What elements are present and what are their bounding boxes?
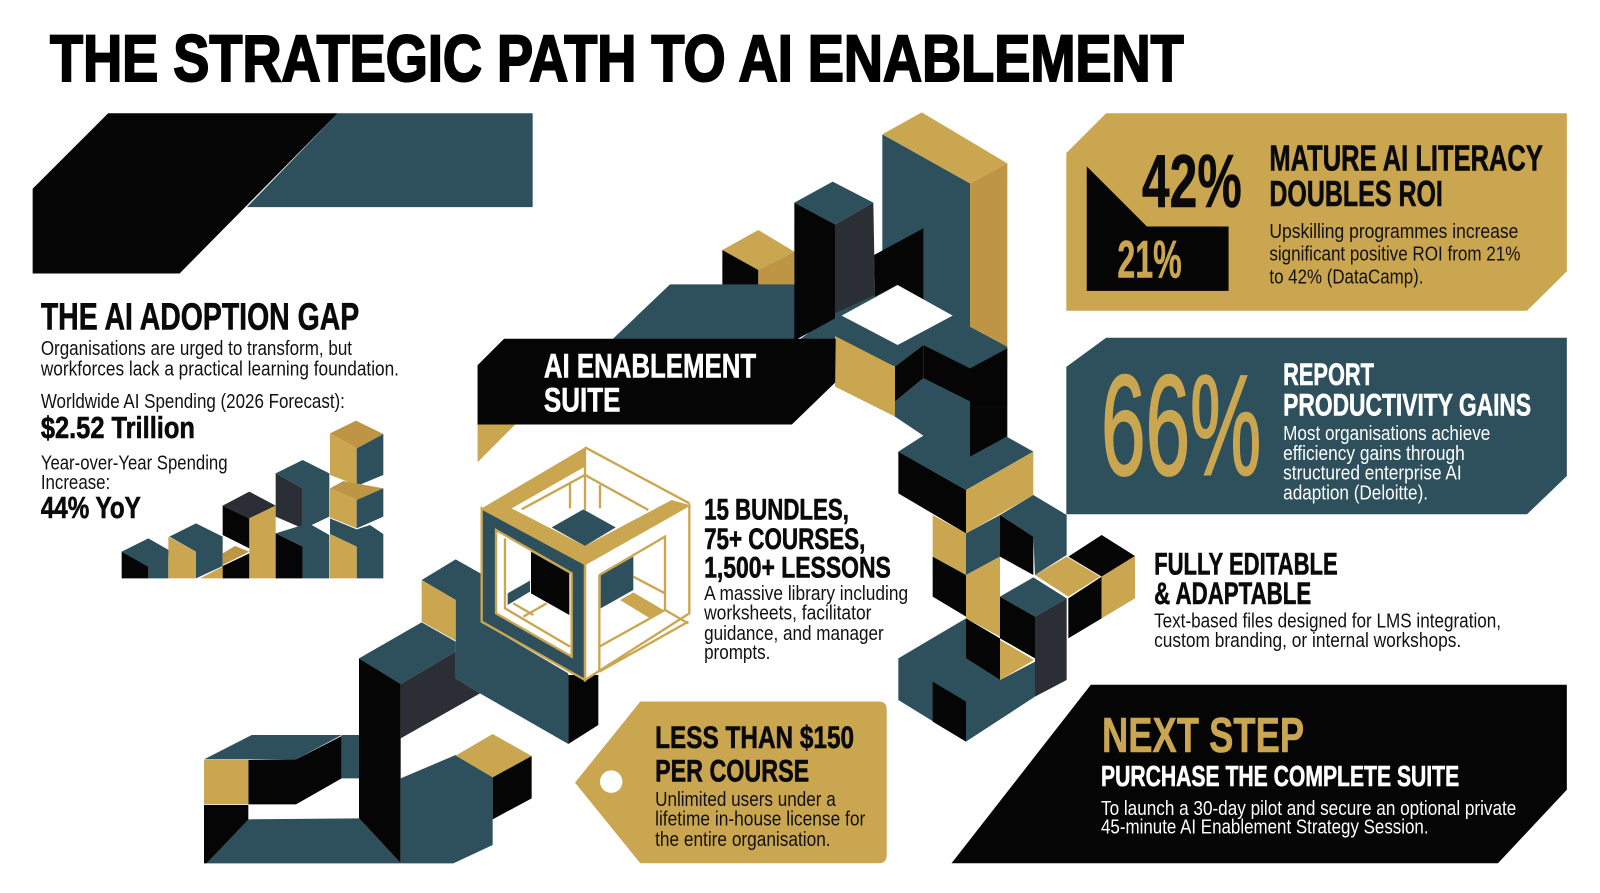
chart: 21 to 42 percent step: 21% bbox=[1117, 231, 1182, 290]
banner: AI enablement suite bbox=[478, 339, 836, 462]
text block: bundles, courses, lessons: A massive library including bbox=[704, 583, 908, 605]
text block: bundles, courses, lessons: prompts. bbox=[704, 642, 770, 664]
text block: literacy description: significant positive ROI from 21% bbox=[1269, 244, 1520, 266]
banner: AI enablement suite: AI ENABLEMENT bbox=[544, 348, 756, 386]
text block: productivity description: adaption (Deloitte). bbox=[1283, 482, 1428, 504]
panel: price tag: PER COURSE bbox=[655, 753, 809, 789]
text block: fully editable and adaptable: & ADAPTABLE bbox=[1154, 575, 1311, 611]
stat: worldwide AI spending bbox=[41, 391, 345, 445]
panel: next step: NEXT STEP bbox=[1102, 709, 1304, 763]
text block: bundles, courses, lessons bbox=[703, 493, 908, 664]
stat: year-over-year increase: Increase: bbox=[41, 472, 110, 494]
stat: year-over-year increase: Year-over-Year Spending bbox=[41, 452, 228, 474]
chart: isometric rising bars bbox=[122, 421, 383, 578]
illustration: central isometric blocks upper bbox=[610, 112, 1007, 438]
decorative header block: black and teal bbox=[33, 113, 533, 273]
panel: productivity gains bbox=[1066, 338, 1567, 514]
stat: year-over-year increase bbox=[41, 452, 228, 525]
text block: literacy description: to 42% (DataCamp). bbox=[1269, 267, 1423, 289]
text block: productivity description: efficiency gains through bbox=[1283, 443, 1465, 465]
text block: fully editable and adaptable: FULLY EDITABLE bbox=[1154, 545, 1338, 581]
panel: next step bbox=[952, 685, 1567, 863]
illustration: lower-left isometric blocks bbox=[204, 559, 598, 863]
text block: productivity description: Most organisations achieve bbox=[1283, 423, 1490, 445]
heading: mature AI literacy: DOUBLES ROI bbox=[1269, 174, 1443, 214]
stat: worldwide AI spending: $2.52 Trillion bbox=[41, 411, 195, 445]
text block: fully editable and adaptable: custom branding, or internal workshops. bbox=[1154, 630, 1461, 652]
text block: bundles, courses, lessons: 15 BUNDLES, bbox=[704, 493, 849, 526]
panel: price tag: Unlimited users under a bbox=[655, 789, 836, 811]
text block: bundles, courses, lessons: 1,500+ LESSONS bbox=[704, 552, 891, 585]
title: THE STRATEGIC PATH TO AI ENABLEMENT bbox=[50, 22, 1184, 96]
banner: AI enablement suite: SUITE bbox=[544, 382, 620, 420]
chart: 21 to 42 percent step bbox=[1087, 140, 1242, 291]
chart: 21 to 42 percent step: 42% bbox=[1142, 140, 1242, 224]
icon: wireframe cube bbox=[482, 447, 689, 680]
stat: 66 percent: 66% bbox=[1101, 346, 1261, 505]
text block: bundles, courses, lessons: worksheets, facilitator bbox=[703, 602, 872, 624]
panel: the AI adoption gap bbox=[40, 296, 399, 525]
panel: price tag: LESS THAN $150 bbox=[655, 719, 854, 755]
text block: literacy description bbox=[1269, 221, 1520, 289]
text block: adoption gap description: workforces lack a practical learning foundation. bbox=[40, 359, 399, 381]
panel: price tag: the entire organisation. bbox=[655, 829, 831, 851]
illustration: central isometric blocks lower bbox=[895, 407, 1135, 742]
text block: bundles, courses, lessons: guidance, and manager bbox=[704, 623, 884, 645]
stat: worldwide AI spending: Worldwide AI Spending (2026 Forecast): bbox=[41, 391, 345, 413]
text block: adoption gap description: Organisations are urged to transform, but bbox=[41, 338, 352, 360]
panel: mature AI literacy bbox=[1066, 113, 1567, 311]
heading: report productivity gains bbox=[1283, 356, 1531, 422]
text block: fully editable and adaptable: Text-based files designed for LMS integration, bbox=[1154, 611, 1501, 633]
panel: next step: 45-minute AI Enablement Strategy Session. bbox=[1101, 817, 1429, 839]
panel: next step: To launch a 30-day pilot and secure an optional private bbox=[1101, 798, 1516, 820]
text block: bundles, courses, lessons: 75+ COURSES, bbox=[704, 523, 865, 556]
text block: productivity description: structured enterprise AI bbox=[1283, 463, 1462, 485]
text block: productivity description bbox=[1283, 423, 1490, 504]
heading: mature AI literacy bbox=[1269, 138, 1543, 214]
heading: adoption gap: THE AI ADOPTION GAP bbox=[41, 296, 359, 338]
panel: next step: PURCHASE THE COMPLETE SUITE bbox=[1101, 761, 1459, 793]
text block: literacy description: Upskilling programmes increase bbox=[1269, 221, 1518, 243]
panel: price tag: lifetime in-house license for bbox=[655, 809, 865, 831]
stat: year-over-year increase: 44% YoY bbox=[41, 491, 141, 525]
heading: report productivity gains: REPORT bbox=[1283, 356, 1374, 392]
text block: fully editable and adaptable bbox=[1154, 545, 1501, 652]
text block: adoption gap description bbox=[40, 338, 399, 381]
panel: price tag bbox=[575, 702, 887, 863]
